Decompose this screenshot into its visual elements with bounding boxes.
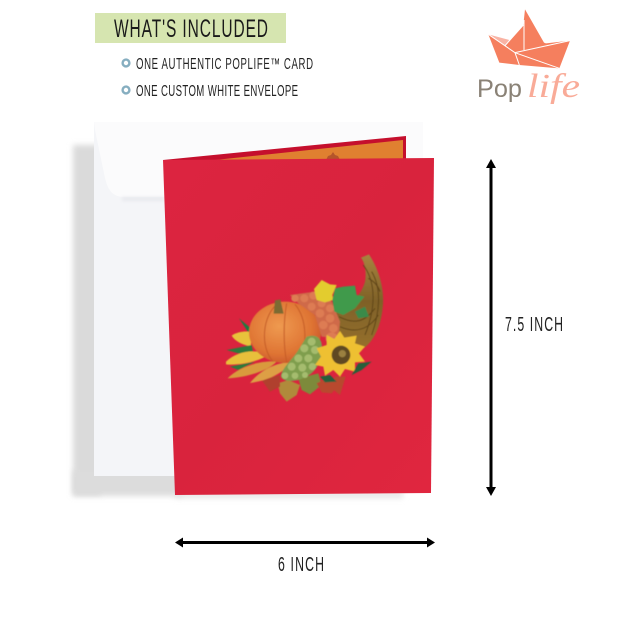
illustration: cornucopia [226, 254, 383, 402]
sunflower [315, 331, 372, 382]
corn and wheat [226, 318, 290, 383]
berries [290, 292, 340, 344]
card front [163, 158, 434, 495]
pumpkin [249, 299, 321, 363]
grapes [281, 336, 322, 381]
logo text: pop: Pop [477, 75, 522, 103]
horn [327, 254, 383, 348]
envelope [94, 122, 423, 476]
icon: origami boat [488, 9, 570, 68]
item: envelope: ONE CUSTOM WHITE ENVELOPE [136, 82, 298, 100]
item: card: ONE AUTHENTIC POPLIFE™ CARD [136, 55, 313, 73]
heading: what's included: WHAT'S INCLUDED [114, 15, 268, 43]
included items list [123, 55, 313, 100]
card inside orange [215, 140, 403, 160]
arrow: height dimension [486, 159, 496, 496]
label: 7.5 inch: 7.5 INCH [505, 313, 563, 336]
logo: poplife [477, 9, 580, 105]
envelope flap [94, 122, 423, 197]
shadow behind envelope [73, 145, 403, 498]
arrow: width dimension [175, 538, 435, 548]
card back [163, 136, 406, 160]
yellow flower [314, 280, 337, 302]
label: 6 inch: 6 INCH [278, 553, 324, 576]
greeting card [163, 136, 434, 495]
logo text: life: life [527, 68, 580, 105]
leaves behind [262, 373, 346, 402]
green leaf [332, 286, 364, 315]
